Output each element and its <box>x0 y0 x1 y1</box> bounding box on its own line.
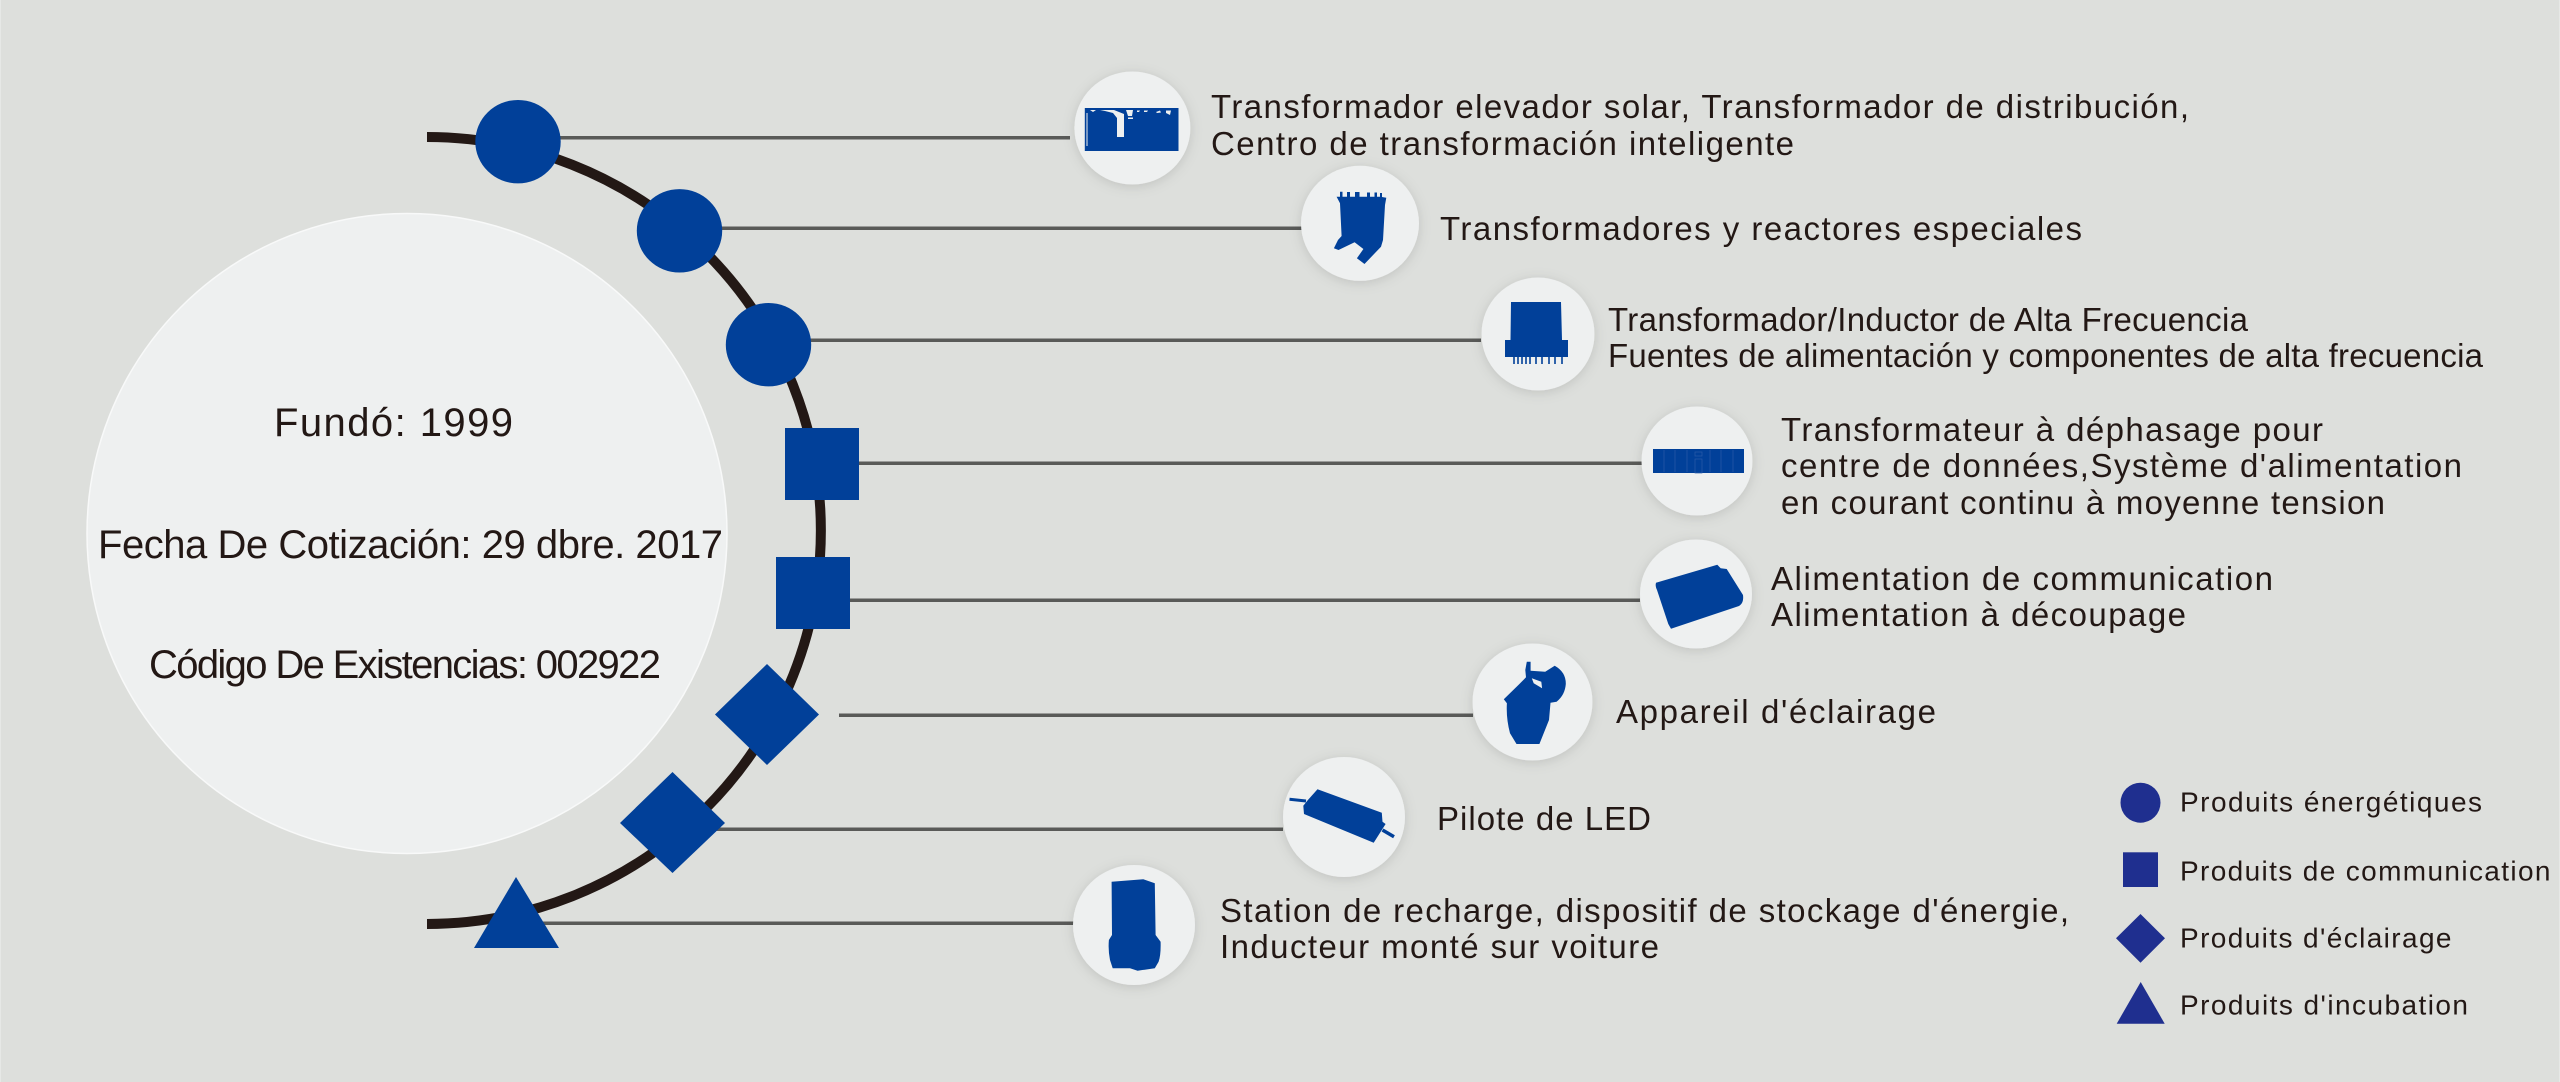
icon: charging station <box>1073 865 1195 985</box>
label: high frequency text: Transformador/Inductor de Alta Frecuencia <box>1608 301 2249 338</box>
legend: incubation products <box>2117 982 2468 1024</box>
text: stock code: Código De Existencias: 002922 <box>149 643 661 687</box>
marker: circle 1 <box>475 100 561 183</box>
icon: solar step-up transformer <box>1074 72 1190 184</box>
marker: diamond 1 <box>715 664 819 765</box>
legend: communication products: Produits de communication <box>2180 856 2550 887</box>
item 6: lighting fixture <box>1472 644 1936 760</box>
icon: LED driver <box>1283 757 1405 877</box>
label: charging station text: Station de recharge, dispositif de stockage d'énergie, <box>1220 892 2069 929</box>
item 2: special transformers <box>1301 166 2082 281</box>
marker: diamond 2 <box>620 772 725 873</box>
label: communication power text: Alimentation à découpage <box>1771 596 2186 633</box>
label: special transformers text: Transformadores y reactores especiales <box>1440 210 2082 247</box>
marker: square 2 <box>776 557 850 629</box>
item 4: phase-shifting transformer <box>1642 406 2462 521</box>
marker: square 1 <box>785 428 859 500</box>
label: charging station text: Inducteur monté sur voiture <box>1220 928 1659 965</box>
label: solar transformer text: Transformador elevador solar, Transformador de distribución, <box>1211 88 2189 125</box>
legend: lighting products <box>2116 914 2452 963</box>
item 3: high frequency <box>1482 278 2484 390</box>
label: communication power text: Alimentation de communication <box>1771 560 2273 597</box>
marker: circle 3 <box>726 303 811 386</box>
item 5: communication power <box>1640 540 2273 648</box>
label: high frequency text <box>1608 301 2484 374</box>
label: high frequency text: Fuentes de alimentación y componentes de alta frecuencia <box>1608 337 2484 374</box>
connector lines <box>540 136 1642 925</box>
label: phase-shifting text: Transformateur à déphasage pour <box>1781 411 2323 448</box>
legend: energy products: Produits énergétiques <box>2180 787 2482 818</box>
icon: communication power supply <box>1640 540 1752 648</box>
label: solar transformer text <box>1211 88 2189 162</box>
icon: phase-shifting transformer <box>1642 406 1752 516</box>
label: phase-shifting text <box>1781 411 2462 521</box>
legend <box>2116 783 2550 1024</box>
label: lighting fixture text: Appareil d'éclairage <box>1616 693 1936 730</box>
item 8: charging station <box>1073 865 2069 985</box>
text: founded: Fundó: 1999 <box>274 401 513 445</box>
item 1: solar transformer <box>1074 72 2189 184</box>
label: charging station text <box>1220 892 2069 965</box>
icon: special transformer <box>1301 166 1419 281</box>
label: phase-shifting text: centre de données,Système d'alimentation <box>1781 447 2462 484</box>
label: phase-shifting text: en courant continu à moyenne tension <box>1781 484 2385 521</box>
legend: energy products <box>2120 783 2482 823</box>
marker: circle 2 <box>637 189 722 272</box>
text: listing date: Fecha De Cotización: 29 dbre. 2017 <box>98 523 723 567</box>
legend: incubation products: Produits d'incubation <box>2180 989 2468 1020</box>
label: solar transformer text: Centro de transformación inteligente <box>1211 125 1794 162</box>
timeline markers <box>474 100 859 948</box>
label: communication power text <box>1771 560 2273 633</box>
legend: lighting products: Produits d'éclairage <box>2180 923 2452 954</box>
curved timeline arc <box>427 137 821 924</box>
icon: lighting fixture <box>1472 644 1592 760</box>
icon: high frequency transformer <box>1482 278 1594 390</box>
panel: company info circle <box>87 214 727 854</box>
label: LED driver text: Pilote de LED <box>1437 800 1651 837</box>
marker: triangle <box>474 877 559 948</box>
item 7: LED driver <box>1283 757 1651 877</box>
